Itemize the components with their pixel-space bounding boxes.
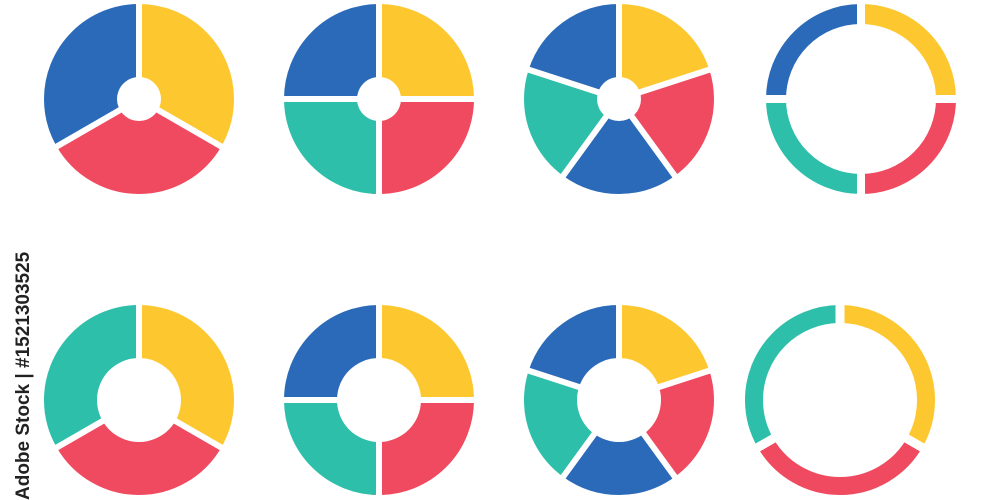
chart: row1 pie 3 segments: [52, 0, 226, 149]
watermark text: Adobe Stock | #1521303525: [13, 251, 34, 500]
chart: row1 pie 4 segments: [279, 0, 479, 199]
chart: row2 donut 5 segments: [524, 300, 714, 481]
chart: row2 donut 3 segments: [52, 300, 226, 450]
chart: row1 ring 4 segments: [761, 0, 961, 199]
chart: row1 pie 5 segments: [524, 0, 714, 180]
chart: row2 ring 3 segments: [753, 300, 927, 486]
chart: row2 donut 4 segments: [279, 300, 479, 500]
